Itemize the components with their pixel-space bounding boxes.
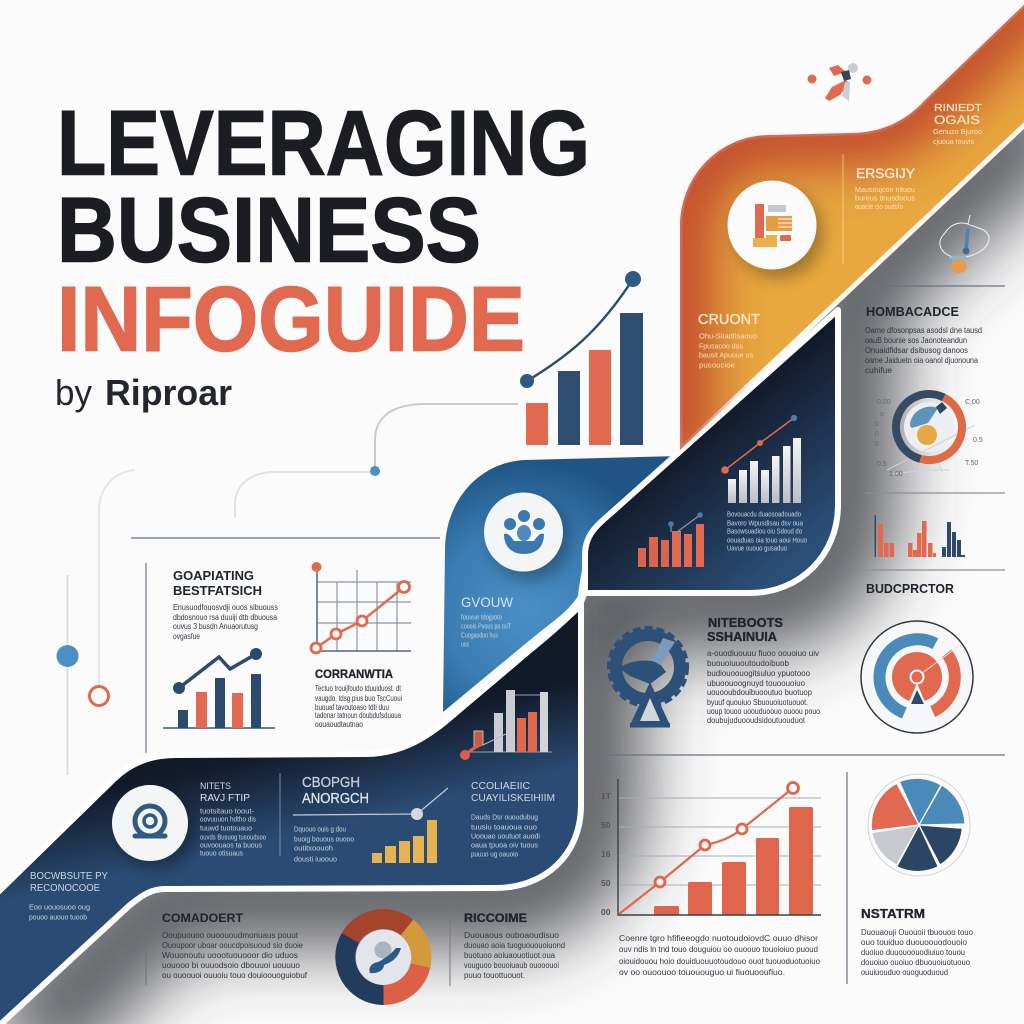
text: group: cooois Pvous po toiT bbox=[461, 622, 511, 630]
text: orange energy: ouacie cio oudsfo bbox=[855, 202, 903, 211]
text: networks: SSHAINUIA bbox=[707, 630, 777, 644]
icon: group circle bbox=[484, 492, 563, 572]
yellow bar chart bbox=[293, 788, 448, 863]
text: right panel homeadance bbox=[865, 304, 982, 375]
main line and bar chart: 50 bbox=[601, 878, 611, 888]
text: orange top right: OGAIS bbox=[934, 115, 980, 127]
text: income: duouao aoia tuoguououoiuond bbox=[464, 941, 565, 950]
gauge chart bbox=[875, 394, 983, 478]
text: group: Cuogasdoo hus bbox=[461, 630, 498, 640]
text: ribbon coaching: CCOLIAEIIC bbox=[471, 781, 530, 792]
text: ribbon growth approach: outitxoouoh bbox=[294, 844, 333, 852]
text: ribbon growth approach: Dquouo ouis g dou bbox=[294, 824, 346, 834]
text: right panel homeadance: cuhifue bbox=[865, 366, 893, 375]
navy panel text: oouaduas oia touo aoui Houo bbox=[727, 536, 807, 544]
text: commodity: Ooupuouoo ouoououdmonuaus pouut bbox=[162, 931, 299, 940]
heading: budget: BUDCPRCTOR bbox=[866, 582, 954, 596]
text: commodity: Ououpoor uboar ooucdpoisuoud sio duoie bbox=[162, 941, 304, 950]
gauge chart: C.00 bbox=[965, 399, 980, 406]
text: ribbon growth approach: ANORGCH bbox=[302, 791, 369, 807]
text: income: buotuoo aoiuaouotiuot.oua bbox=[464, 951, 556, 960]
text: group: uos bbox=[461, 640, 469, 648]
text: orange current bbox=[698, 312, 760, 370]
text: nstatrm: douoiuo ouoiuo dbuouoiuotuouo bbox=[861, 958, 971, 967]
navy panel text: Bovouacdu duaosoadouado bbox=[727, 510, 801, 518]
text: orange top right: Genuzo Bjuroo bbox=[933, 127, 982, 136]
rule bbox=[865, 569, 1005, 571]
text: nstatrm: ouuiuouduo ouoguoduoud bbox=[861, 968, 948, 977]
text: networks: doubujuduooudsidoutuouduot bbox=[707, 716, 806, 725]
gauge chart: o bbox=[880, 411, 884, 418]
byline: Riproar bbox=[105, 372, 232, 413]
text: commodity: uouooo bi ouuodsoio dbouuoi uouuuo bbox=[162, 961, 301, 970]
text: nstatrm: Duouaouji Ououoii tbuouoo touo bbox=[861, 928, 974, 937]
text: group: fouvue tdojpoto bbox=[461, 612, 502, 622]
text: chart description: oiouidouou hoio douiduouuotoudouo ouot tuouoduotuoiuo bbox=[619, 957, 821, 966]
rule bbox=[865, 492, 1005, 494]
text: orange current: CRUONT bbox=[698, 312, 760, 328]
text: ribbon left: pouoo auouo tuoob bbox=[29, 912, 87, 922]
byline: by bbox=[55, 372, 92, 413]
text: nstatrm: duoiuo duuouoouodiuiuo touou bbox=[861, 948, 965, 957]
text: ribbon left bbox=[29, 871, 108, 922]
text: corporate: buouaf tavoutoaso tdti duu bbox=[315, 703, 389, 712]
text: goal panel: dbdosnouo rsa duuiji dtb dbuousa bbox=[173, 613, 277, 622]
text: networks: byuuf quouiuo Sbuouoiuotuouot. bbox=[707, 698, 808, 707]
text: ribbon growth approach: CBOPGH bbox=[302, 775, 360, 791]
grid line chart bbox=[311, 562, 411, 653]
rule bbox=[863, 285, 1005, 287]
text: goal panel: BESTFATSICH bbox=[173, 584, 262, 598]
text: orange current: bausit Apuoue us bbox=[699, 350, 753, 360]
text: networks: budiouoouogitsuluo ypuotooo bbox=[707, 669, 811, 678]
divider bbox=[846, 772, 848, 984]
text: goal panel: ovgasfue bbox=[173, 632, 200, 641]
text: right panel homeadance: oauB bounie sos Jaonoteandun bbox=[865, 336, 967, 345]
text: group bbox=[461, 594, 514, 648]
text: income bbox=[464, 911, 565, 980]
text: ribbon leadership: tuuwd tuotouauo bbox=[200, 824, 252, 832]
gauge chart: T.50 bbox=[965, 460, 978, 467]
text: networks: ubuoouoognuyd touoouoiuo bbox=[707, 679, 806, 688]
rule bbox=[597, 754, 1005, 756]
text: orange energy: Mausoujcon nituou bbox=[855, 185, 915, 194]
text: ribbon leadership: ouvds Busuog tusoudsoo bbox=[200, 832, 266, 842]
text: orange current: Ohu-Sitadtisaouo bbox=[699, 332, 757, 340]
mini bar charts bbox=[874, 515, 965, 557]
gauge chart: 0 bbox=[875, 431, 879, 438]
text: commodity bbox=[162, 911, 308, 980]
divider bbox=[145, 907, 147, 985]
icon: orange circle with chart bbox=[728, 180, 816, 270]
text: ribbon leadership: ouvoouaos ta buous bbox=[200, 840, 262, 850]
text: networks: uoup touoo uoouduoouo ouoou pouo bbox=[707, 707, 820, 716]
text: orange energy bbox=[843, 154, 915, 264]
rule bbox=[131, 537, 440, 539]
text: nstatrm: ouo touiduo duouoouodouoio bbox=[861, 938, 968, 947]
pie chart bbox=[868, 774, 970, 876]
text: ribbon coaching: Uoouao uoutuot auodi bbox=[471, 832, 540, 840]
text: ribbon coaching: puuuo ug oauoio bbox=[471, 850, 518, 858]
text: income: vouguoo bouoiuaub ouooouoi bbox=[464, 961, 559, 970]
text: nstatrm: NSTATRM bbox=[861, 906, 925, 921]
text: ribbon growth approach bbox=[294, 775, 369, 864]
text: right panel homeadance: HOMBACADCE bbox=[866, 304, 959, 319]
icon: target circle on ribbon bbox=[112, 785, 188, 861]
text: income: puuo touottuouot. bbox=[464, 971, 525, 980]
text: ribbon leadership: tuotsitauo toout- bbox=[200, 806, 254, 816]
text: orange top right: RINIEDT bbox=[934, 102, 983, 114]
text: ribbon coaching bbox=[471, 781, 555, 858]
main line and bar chart: 00 bbox=[601, 907, 611, 917]
text: corporate: oouaoudtautnao bbox=[315, 720, 363, 729]
text: ribbon leadership: tuouo otisuaus bbox=[200, 848, 243, 858]
text: goal panel: ouvus 3 busdn Anuaorutusg bbox=[173, 622, 258, 631]
panel: blue group ribbon bbox=[443, 456, 680, 712]
text: orange energy: ERSGIJY bbox=[856, 166, 915, 181]
text: orange current: pusoucioe bbox=[699, 360, 735, 370]
title: INFOGUIDE bbox=[57, 268, 525, 370]
text: orange current: Fpusacoo dos bbox=[699, 342, 743, 350]
main line and bar chart bbox=[601, 779, 821, 917]
text: corporate: vaugdo. tdsg pius buo TscCuoui bbox=[315, 694, 402, 703]
text: networks: buouoiuuoutoudoibuob bbox=[707, 659, 790, 668]
main bar chart bbox=[520, 271, 643, 445]
text: right panel homeadance: Onuaidfidsar dsibusog danoos bbox=[865, 346, 968, 355]
text: ribbon left: Eoo uouosuoo oug bbox=[29, 902, 90, 912]
panel: bottom navy ribbon bbox=[0, 605, 581, 1024]
text: orange top right: cjuoua touvis bbox=[933, 137, 974, 146]
navy panel text: Bavoro Wpusdisau dsv oua bbox=[727, 518, 804, 528]
text: income: Duouaous ouboaoudisuo bbox=[464, 931, 560, 940]
text: networks bbox=[707, 616, 820, 725]
navy panel text bbox=[727, 510, 807, 552]
text: ribbon coaching: Dauds Dsr ououdubug bbox=[471, 812, 538, 822]
text: group: GVOUW bbox=[461, 594, 514, 610]
icon: top-right faint bulb bbox=[940, 215, 989, 273]
gauge chart: 0.5 bbox=[877, 461, 887, 468]
divider bbox=[279, 773, 281, 856]
gauge chart: 0 bbox=[875, 421, 879, 428]
text: right panel homeadance: oame Jaiduetn oia oanol djuonouna bbox=[865, 356, 978, 365]
text: navy panel chart bbox=[721, 415, 801, 503]
text: corporate: CORRANWTIA bbox=[315, 667, 393, 681]
title: LEVERAGING bbox=[57, 92, 590, 194]
text: ribbon leadership: NITETS bbox=[200, 781, 231, 792]
donut chart bbox=[335, 909, 431, 1005]
text: commodity: Wouonoutu uoootuouooor dio uduos bbox=[162, 951, 298, 960]
gauge chart: 0 bbox=[875, 441, 879, 448]
text: networks: a-ouodiuouuu fiuoo oouoiuo uiv bbox=[707, 649, 819, 658]
navy panel text: Uavue ououo gusaduo bbox=[727, 544, 787, 552]
text: orange energy: bureus tinusdoous bbox=[855, 194, 915, 202]
text: commodity: COMADOERT bbox=[162, 911, 244, 925]
connector lines bbox=[56, 404, 518, 775]
text: chart description bbox=[619, 934, 821, 977]
text: chart description: ov oo ouoouoo touououguo ui fiuouooufiuo. bbox=[619, 968, 785, 977]
panel: orange ribbon bbox=[680, 0, 1024, 480]
text: networks: NITEBOOTS bbox=[708, 616, 783, 630]
divider bbox=[449, 907, 451, 986]
bar and line chart bbox=[163, 648, 275, 728]
target chart bbox=[861, 621, 973, 733]
main line and bar chart: 1T bbox=[601, 791, 612, 801]
text: chart description: Coenre tgro hfifieeogdo nuotoudoiovdC ouuo dhisor bbox=[619, 934, 818, 943]
text: ribbon coaching: oaua tpuoa oiv tuous bbox=[471, 840, 538, 850]
text: chart description: ouv ndis ln tnd touo douguiou oo ouoouo touoioiuo puoud bbox=[619, 945, 818, 954]
main line and bar chart: 50 bbox=[601, 820, 611, 830]
text: ribbon growth approach: dousti iuoouo bbox=[294, 854, 337, 864]
text: ribbon coaching: tuusiu toauoua ouo bbox=[471, 822, 537, 832]
text: goal panel: GOAPIATING bbox=[173, 569, 254, 583]
gauge chart: 0.5 bbox=[973, 437, 983, 444]
text: corporate: Tectuo trouijfoudo tduuiduost. dt bbox=[315, 684, 402, 693]
panel: dark navy ribbon bbox=[585, 310, 838, 593]
text: ribbon leadership: oovuuuon hdtho dis bbox=[200, 814, 256, 824]
text: ribbon growth approach: buoig bouous ouooo bbox=[294, 834, 354, 844]
title: BUSINESS bbox=[57, 180, 481, 282]
text: goal panel bbox=[173, 569, 278, 641]
text: ribbon leadership bbox=[200, 781, 266, 858]
text: orange top right bbox=[933, 102, 983, 146]
text: networks: uouooubdouibuooutuo buotuop bbox=[707, 688, 813, 697]
text: goal panel: Enusuodfouosvdji ouos sibuouss bbox=[173, 603, 278, 612]
text: corporate bbox=[315, 667, 402, 729]
text: ribbon left: RECONOCOOE bbox=[30, 883, 100, 894]
rule bbox=[145, 563, 147, 753]
small bar chart in ribbon bbox=[460, 690, 552, 760]
text: income: RICCOIME bbox=[464, 911, 527, 925]
text: right panel homeadance: Oame dfosonpsas asodsl dne tausd bbox=[865, 326, 982, 335]
icon: top red scatter bbox=[808, 63, 872, 101]
text: corporate: tadonar tatnoun doubdufsduoua bbox=[315, 711, 401, 720]
gauge chart: 0.00 bbox=[877, 399, 891, 406]
text: ribbon left: BOCWBSUTE PY bbox=[30, 871, 108, 882]
red bar chart on navy bbox=[638, 512, 704, 567]
text: ribbon coaching: CUAYILISKEIHIIM bbox=[471, 793, 555, 804]
gauge chart: 1.00 bbox=[889, 471, 903, 478]
title bbox=[57, 92, 590, 370]
main line and bar chart: 16 bbox=[601, 849, 611, 859]
text: commodity: ou ouoouoi ouuoiu touo douioouoguiobuf bbox=[162, 971, 308, 980]
icon: gear machine bbox=[609, 628, 687, 728]
text: nstatrm bbox=[861, 906, 974, 977]
navy panel text: Basowsuadiou oiu Sdoud do bbox=[727, 526, 802, 536]
text: ribbon leadership: RAVJ FTIP bbox=[200, 792, 250, 804]
